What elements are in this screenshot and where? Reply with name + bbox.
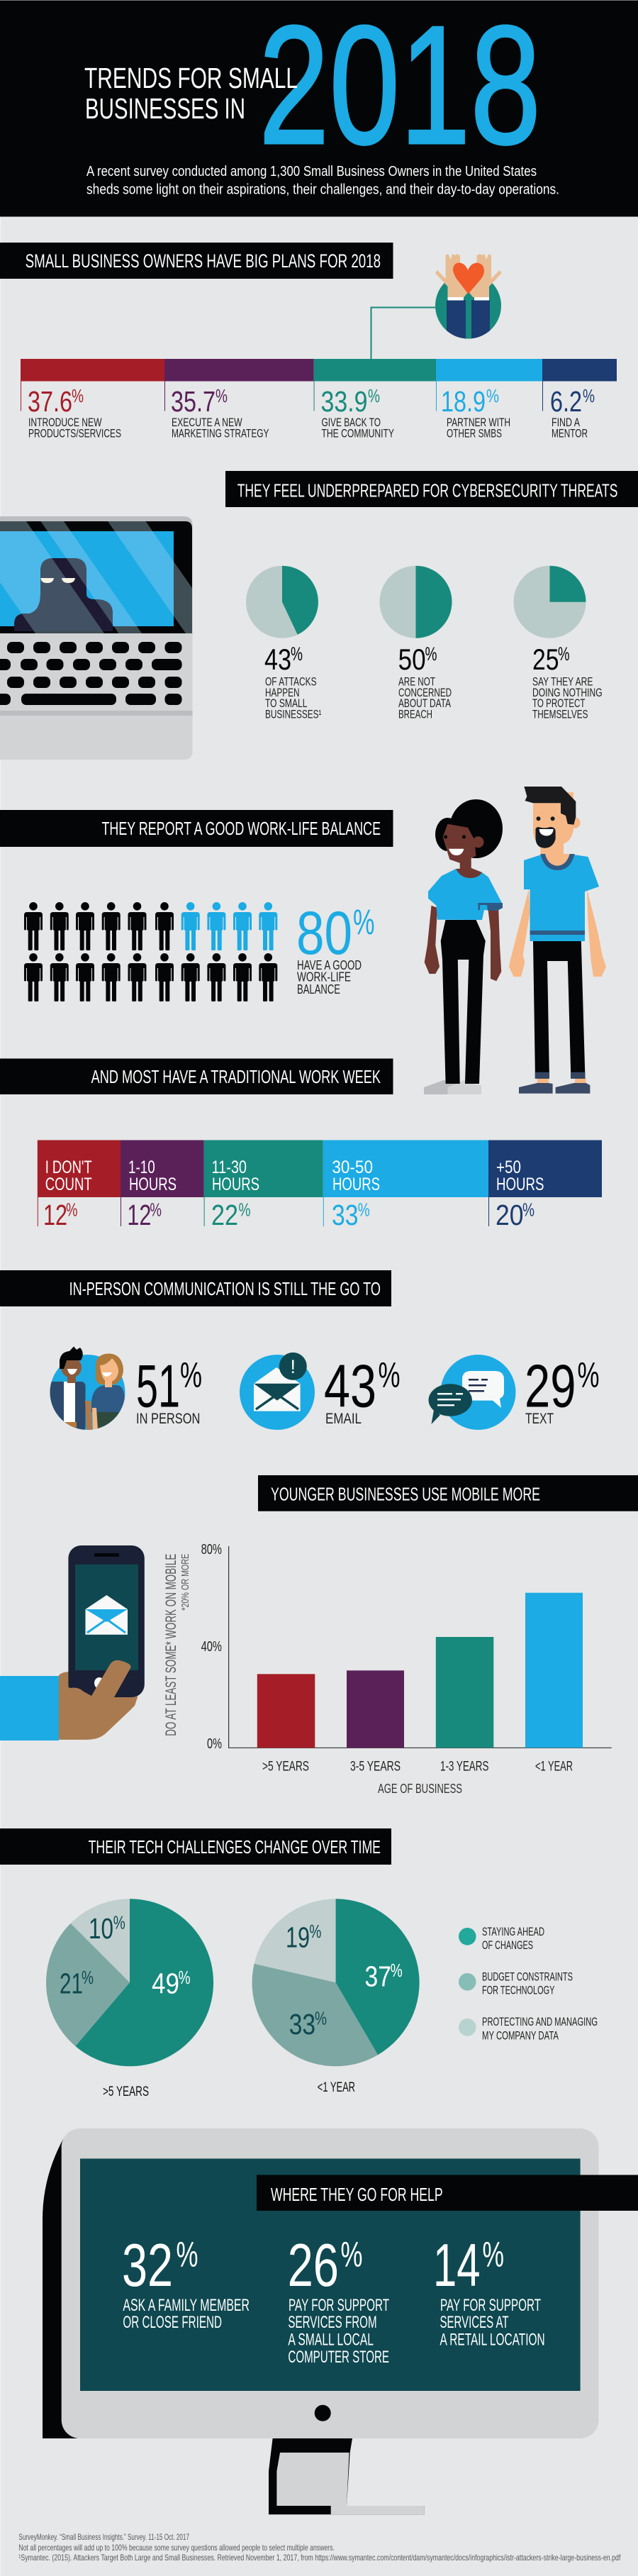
stat: 80% work-life: % bbox=[353, 902, 374, 942]
hacker figure bbox=[14, 558, 113, 631]
segment: 1-10 hours: % bbox=[150, 1199, 162, 1220]
x axis labels: 1-3 YEARS bbox=[440, 1760, 488, 1775]
stat: 43% email: 43 bbox=[324, 1353, 376, 1420]
pie chart: over 5 years: 10 bbox=[89, 1912, 113, 1945]
desktop monitor bbox=[43, 2128, 598, 2514]
stat: 37.6% new products: 37.6 bbox=[28, 385, 72, 418]
y axis labels: 0% bbox=[207, 1736, 222, 1752]
segment: +50 hours: HOURS bbox=[496, 1175, 544, 1194]
icon: hand holding phone bbox=[0, 1545, 145, 1741]
illustration: woman bbox=[424, 799, 503, 1094]
intro text: sheds some light on their aspirations, their challenges, and their day-to-day operations. bbox=[86, 182, 559, 197]
pie chart: under 1 year: % bbox=[391, 1960, 403, 1981]
stat: 51% in person: % bbox=[180, 1355, 202, 1394]
laptop with hacker bbox=[0, 516, 193, 760]
bar chart: mobile use by age bbox=[201, 1542, 612, 1796]
segment: 30-50 hours: % bbox=[358, 1199, 370, 1220]
pie: 43% attacks bbox=[246, 566, 322, 721]
stat: 33.9% community: GIVE BACK TO bbox=[322, 416, 381, 429]
pie: 50% not concerned: BREACH bbox=[398, 708, 432, 721]
pie chart: under 1 year: % bbox=[315, 2007, 327, 2028]
y axis labels bbox=[201, 1542, 222, 1752]
segment: I don't count bbox=[38, 1140, 121, 1231]
heading: tech challenges: THEIR TECH CHALLENGES CHANGE OVER TIME bbox=[89, 1836, 381, 1858]
stat: 80% work-life: 80 bbox=[296, 899, 352, 967]
stat: 26% local computer store: PAY FOR SUPPORT bbox=[289, 2296, 389, 2315]
stat: 33.9% community: % bbox=[368, 385, 380, 406]
stat: 26% local computer store: SERVICES FROM bbox=[288, 2313, 377, 2332]
pie chart: under 1 year: 19 bbox=[286, 1921, 310, 1954]
stat: 32% family or friend: % bbox=[176, 2234, 198, 2274]
segment: 30-50 hours bbox=[323, 1140, 488, 1231]
stat: 33.9% community: 33.9 bbox=[320, 385, 367, 418]
stat: 32% family or friend: OR CLOSE FRIEND bbox=[123, 2313, 222, 2332]
stat: 18.9% partner: OTHER SMBS bbox=[447, 427, 502, 440]
pie chart: over 5 years: >5 YEARS bbox=[103, 2084, 149, 2099]
icon: two people talking bbox=[50, 1346, 125, 1430]
footnotes: SurveyMonkey. “Small Business Insights.” Survey. 11-15 Oct. 2017 bbox=[18, 2532, 189, 2542]
segment: 30-50 hours: 33 bbox=[332, 1199, 359, 1231]
x axis labels: <1 YEAR bbox=[535, 1760, 573, 1775]
heading: traditional work week bbox=[0, 1058, 393, 1094]
pie: 43% attacks: OF ATTACKS bbox=[265, 675, 317, 689]
stat: 35.7% marketing: 35.7 bbox=[171, 385, 216, 418]
stat: 6.2% mentor: % bbox=[583, 385, 595, 406]
segment: I don't count: I DON'T bbox=[45, 1157, 92, 1177]
pie chart: over 5 years: 49 bbox=[152, 1967, 179, 2000]
title: TRENDS FOR SMALL bbox=[84, 62, 298, 94]
stacked bar: 2018 plans bbox=[21, 359, 617, 411]
stat: 18.9% partner: 18.9 bbox=[441, 385, 486, 418]
stat: 80% work-life: HAVE A GOOD bbox=[297, 958, 362, 972]
axis label: work on mobile bbox=[163, 1554, 191, 1736]
pie: 50% not concerned bbox=[380, 566, 452, 721]
pie: 43% attacks: 43 bbox=[264, 643, 291, 676]
legend: MY COMPANY DATA bbox=[482, 2028, 559, 2042]
stat: 14% retail location: 14 bbox=[433, 2232, 481, 2299]
pictogram: 20 people bbox=[24, 902, 277, 1001]
heading: where they go for help: WHERE THEY GO FOR HELP bbox=[271, 2184, 443, 2205]
stat: 18.9% partner: PARTNER WITH bbox=[447, 416, 510, 429]
monitor stand bbox=[269, 2438, 425, 2514]
stat: 43% email: % bbox=[379, 1355, 400, 1394]
pie: 25% doing nothing: SAY THEY ARE bbox=[532, 675, 593, 689]
pie chart: over 5 years bbox=[46, 1899, 213, 2099]
segment: I don't count: % bbox=[66, 1199, 78, 1220]
segment: +50 hours: % bbox=[522, 1199, 535, 1220]
segment: +50 hours: +50 bbox=[496, 1157, 521, 1177]
pie: 50% not concerned: ABOUT DATA bbox=[398, 696, 451, 710]
stat: 29% text: % bbox=[577, 1355, 600, 1394]
pie chart: under 1 year: <1 YEAR bbox=[318, 2080, 355, 2095]
pie chart: over 5 years: % bbox=[82, 1967, 94, 1988]
icon: email envelope: ! bbox=[291, 1356, 296, 1377]
pie: 43% attacks: TO SMALL bbox=[265, 696, 307, 710]
pie chart: under 1 year: 37 bbox=[364, 1960, 391, 1993]
footnotes: Not all percentages will add up to 100% because some survey questions allowed people to select multiple answers. bbox=[18, 2543, 335, 2553]
pie chart: over 5 years: % bbox=[113, 1912, 125, 1933]
stat: 37.6% new products: % bbox=[72, 385, 84, 406]
stat: 35.7% marketing: MARKETING STRATEGY bbox=[172, 427, 269, 440]
segment: I don't count: COUNT bbox=[45, 1175, 92, 1194]
x axis title: AGE OF BUSINESS bbox=[378, 1782, 462, 1796]
legend: OF CHANGES bbox=[482, 1938, 533, 1952]
title: BUSINESSES IN bbox=[85, 92, 245, 125]
segment: 1-10 hours bbox=[121, 1140, 204, 1231]
stat: 35.7% marketing: % bbox=[216, 385, 228, 406]
illustration: man bbox=[509, 787, 606, 1094]
icon: email envelope bbox=[240, 1353, 315, 1430]
pie chart: under 1 year: 33 bbox=[289, 2008, 315, 2041]
stat: 26% local computer store: COMPUTER STORE bbox=[288, 2348, 389, 2367]
stat: 26% local computer store: A SMALL LOCAL bbox=[288, 2330, 374, 2349]
axis label: work on mobile: DO AT LEAST SOME* WORK ON MOBILE bbox=[163, 1554, 179, 1736]
stat: 14% retail location: SERVICES AT bbox=[440, 2313, 509, 2332]
heading: work-life balance bbox=[0, 810, 393, 847]
pie: 25% doing nothing: % bbox=[558, 643, 570, 665]
stat: 32% family or friend: 32 bbox=[122, 2232, 173, 2299]
segment: 11-30 hours: 11-30 bbox=[211, 1157, 247, 1177]
stat: 6.2% mentor: MENTOR bbox=[552, 427, 588, 440]
heading: work-life balance: THEY REPORT A GOOD WORK-LIFE BALANCE bbox=[102, 818, 381, 839]
stat: 32% family or friend bbox=[122, 2232, 250, 2332]
segment: 1-10 hours: 12 bbox=[127, 1199, 151, 1231]
segment: 11-30 hours: % bbox=[238, 1199, 251, 1220]
legend: FOR TECHNOLOGY bbox=[482, 1983, 554, 1997]
heading: where they go for help bbox=[257, 2175, 638, 2211]
stat: 14% retail location: A RETAIL LOCATION bbox=[440, 2330, 545, 2349]
pie: 43% attacks: HAPPEN bbox=[265, 686, 299, 699]
footnotes bbox=[18, 2532, 621, 2563]
x axis labels: >5 YEARS bbox=[262, 1760, 309, 1775]
stat: 26% local computer store: 26 bbox=[288, 2232, 339, 2299]
bars bbox=[257, 1593, 583, 1748]
stat: 29% text: 29 bbox=[525, 1353, 576, 1420]
y axis labels: 80% bbox=[201, 1542, 222, 1558]
stat: 35.7% marketing: EXECUTE A NEW bbox=[172, 416, 242, 429]
stat: 26% local computer store bbox=[288, 2232, 389, 2367]
pie: 25% doing nothing bbox=[513, 566, 603, 721]
segment: 30-50 hours: HOURS bbox=[332, 1175, 380, 1194]
stat: 51% in person: IN PERSON bbox=[136, 1411, 200, 1427]
heading: big plans: SMALL BUSINESS OWNERS HAVE BIG PLANS FOR 2018 bbox=[26, 250, 381, 272]
heading: traditional work week: AND MOST HAVE A TRADITIONAL WORK WEEK bbox=[91, 1066, 381, 1087]
pie chart: over 5 years: 21 bbox=[60, 1967, 83, 2000]
stat: 6.2% mentor: 6.2 bbox=[550, 385, 582, 418]
legend bbox=[459, 1925, 598, 2042]
stat: 51% in person: 51 bbox=[136, 1353, 180, 1420]
segment: +50 hours bbox=[488, 1140, 602, 1231]
stacked bar: work week bbox=[38, 1140, 602, 1231]
pie: 25% doing nothing: DOING NOTHING bbox=[532, 686, 603, 699]
stat: 37.6% new products: INTRODUCE NEW bbox=[28, 416, 102, 429]
pie chart: under 1 year: % bbox=[309, 1921, 321, 1942]
heading: tech challenges bbox=[0, 1828, 391, 1865]
pie chart: under 1 year bbox=[252, 1899, 420, 2095]
stat: 37.6% new products bbox=[28, 385, 121, 440]
stat: 18.9% partner bbox=[441, 385, 510, 440]
x axis labels bbox=[262, 1760, 573, 1775]
intro text bbox=[86, 164, 559, 197]
legend: BUDGET CONSTRAINTS bbox=[482, 1970, 573, 1984]
segment: 11-30 hours: HOURS bbox=[212, 1175, 259, 1194]
segment: I don't count: 12 bbox=[43, 1199, 67, 1231]
stat: 29% text: TEXT bbox=[525, 1411, 554, 1427]
stat: 35.7% marketing bbox=[171, 385, 269, 440]
legend: STAYING AHEAD bbox=[482, 1925, 544, 1938]
pie: 50% not concerned: % bbox=[425, 643, 437, 665]
pie: 25% doing nothing: TO PROTECT bbox=[532, 696, 586, 710]
keyboard bbox=[0, 642, 182, 705]
stat: 14% retail location bbox=[433, 2232, 545, 2349]
heading: in-person communication bbox=[0, 1270, 391, 1306]
x axis labels: 3-5 YEARS bbox=[350, 1760, 401, 1775]
stat: 33.9% community: THE COMMUNITY bbox=[322, 427, 394, 440]
icon: text bubbles bbox=[428, 1355, 516, 1430]
stat: 80% work-life: WORK-LIFE bbox=[297, 970, 351, 984]
stat: 37.6% new products: PRODUCTS/SERVICES bbox=[28, 427, 121, 440]
heading: younger businesses mobile bbox=[258, 1475, 638, 1511]
connector line bbox=[371, 308, 435, 359]
stat: 6.2% mentor: FIND A bbox=[552, 416, 580, 429]
pie: 43% attacks: % bbox=[291, 643, 303, 665]
segment: 1-10 hours: HOURS bbox=[129, 1175, 177, 1194]
heading: big plans bbox=[0, 243, 393, 279]
stat: 18.9% partner: % bbox=[486, 385, 499, 406]
y axis labels: 40% bbox=[201, 1639, 222, 1655]
segment: +50 hours: 20 bbox=[496, 1199, 523, 1231]
stat: 80% work-life bbox=[296, 899, 374, 996]
pie: 50% not concerned: 50 bbox=[398, 643, 426, 676]
pie: 25% doing nothing: 25 bbox=[532, 643, 559, 676]
pie: 50% not concerned: ARE NOT bbox=[398, 675, 435, 689]
stat: 14% retail location: PAY FOR SUPPORT bbox=[440, 2296, 541, 2315]
stat: 14% retail location: % bbox=[482, 2234, 504, 2274]
stat: 26% local computer store: % bbox=[340, 2234, 363, 2274]
stat: 80% work-life: BALANCE bbox=[297, 982, 340, 996]
segment: 11-30 hours: 22 bbox=[211, 1199, 238, 1231]
stat: 43% email: EMAIL bbox=[325, 1411, 362, 1427]
icon: hands holding heart bbox=[435, 254, 502, 343]
pie: 50% not concerned: CONCERNED bbox=[398, 686, 452, 699]
stat: 6.2% mentor bbox=[550, 385, 595, 440]
segment: 1-10 hours: 1-10 bbox=[128, 1157, 155, 1177]
pie: 43% attacks: BUSINESSES¹ bbox=[265, 708, 322, 721]
header banner bbox=[0, 0, 638, 217]
heading: in-person communication: IN-PERSON COMMUNICATION IS STILL THE GO TO bbox=[69, 1278, 381, 1299]
heading: cybersecurity bbox=[225, 471, 638, 507]
title bbox=[84, 62, 298, 125]
axis label: work on mobile: *20% OR MORE bbox=[179, 1554, 191, 1611]
segment: 30-50 hours: 30-50 bbox=[332, 1157, 373, 1177]
stat: 32% family or friend: ASK A FAMILY MEMBER bbox=[123, 2296, 250, 2315]
intro text: A recent survey conducted among 1,300 Small Business Owners in the United States bbox=[86, 164, 537, 179]
pie chart: over 5 years: % bbox=[179, 1967, 191, 1988]
stat: 33.9% community bbox=[320, 385, 394, 440]
pie: 25% doing nothing: THEMSELVES bbox=[532, 708, 588, 721]
segment: 11-30 hours bbox=[204, 1140, 323, 1231]
